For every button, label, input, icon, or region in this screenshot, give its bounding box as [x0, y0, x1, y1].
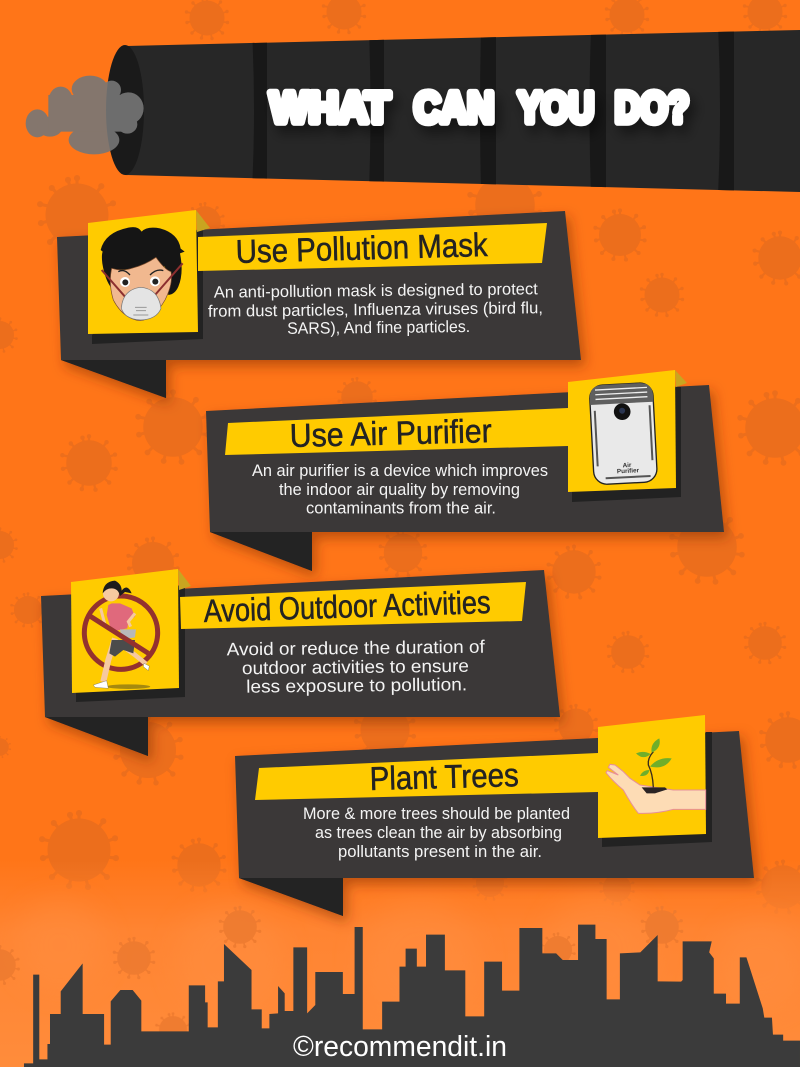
card shadow	[92, 230, 203, 344]
pipe bands	[252, 25, 734, 195]
panel background	[41, 570, 560, 756]
body text: the indoor air quality by removing	[279, 481, 520, 499]
icon: no running	[84, 581, 158, 689]
heading ribbon	[225, 408, 568, 455]
yellow card	[88, 210, 198, 334]
icon: air purifier: Purifier	[617, 467, 640, 475]
title: WHAT	[270, 84, 390, 132]
body text	[208, 280, 543, 339]
heading: Use Air Purifier	[289, 412, 492, 454]
ribbon tail	[61, 360, 166, 398]
body text	[227, 637, 486, 697]
icon: hand holding seedling	[606, 738, 706, 813]
fold	[675, 370, 687, 387]
body text	[252, 462, 548, 518]
body text: as trees clean the air by absorbing	[315, 824, 562, 842]
title	[270, 84, 689, 132]
card shadow	[602, 732, 712, 847]
yellow card	[71, 569, 179, 693]
pipe	[106, 25, 800, 195]
ribbon tail	[45, 717, 148, 756]
heading: Avoid Outdoor Activities	[203, 584, 491, 629]
body text	[303, 805, 570, 861]
body text: An air purifier is a device which improves	[252, 462, 548, 480]
body text: pollutants present in the air.	[338, 843, 542, 861]
smog haze	[0, 860, 800, 1067]
yellow card	[568, 370, 676, 492]
smoke	[26, 76, 144, 154]
body text: outdoor activities to ensure	[242, 656, 469, 678]
icon: air purifier: Air	[622, 462, 632, 469]
city skyline	[24, 925, 800, 1067]
heading ribbon	[180, 582, 526, 629]
ribbon tail	[210, 532, 312, 571]
body text: from dust particles, Influenza viruses (bird flu,	[208, 299, 543, 321]
body text: less exposure to pollution.	[246, 674, 467, 697]
ribbon tail	[239, 878, 343, 916]
panel: use air purifier	[206, 370, 724, 571]
heading ribbon	[198, 223, 547, 271]
panel background	[206, 385, 724, 571]
body text: More & more trees should be planted	[303, 805, 570, 823]
body text: contaminants from the air.	[306, 500, 496, 518]
fold	[196, 210, 210, 232]
panel background	[57, 211, 581, 398]
icon: boy wearing mask	[101, 227, 185, 321]
panel: use pollution mask	[57, 210, 581, 398]
title: DO?	[615, 84, 689, 132]
panel: avoid outdoor activities	[41, 569, 560, 756]
heading ribbon	[255, 753, 598, 800]
card shadow	[572, 387, 681, 502]
body text: An anti-pollution mask is designed to protect	[214, 280, 538, 302]
heading: Use Pollution Mask	[235, 226, 489, 270]
body text: SARS), And fine particles.	[287, 318, 470, 338]
title: CAN	[414, 84, 494, 132]
yellow card	[598, 715, 706, 838]
card shadow	[76, 585, 185, 702]
body text: Avoid or reduce the duration of	[227, 637, 486, 659]
footer credit: ©recommendit.in	[293, 1031, 507, 1063]
title: YOU	[518, 84, 594, 132]
heading: Plant Trees	[369, 756, 519, 797]
panel: plant trees	[235, 715, 754, 916]
panel background	[235, 731, 754, 916]
fold	[178, 569, 191, 590]
icon: air purifier	[589, 382, 658, 485]
